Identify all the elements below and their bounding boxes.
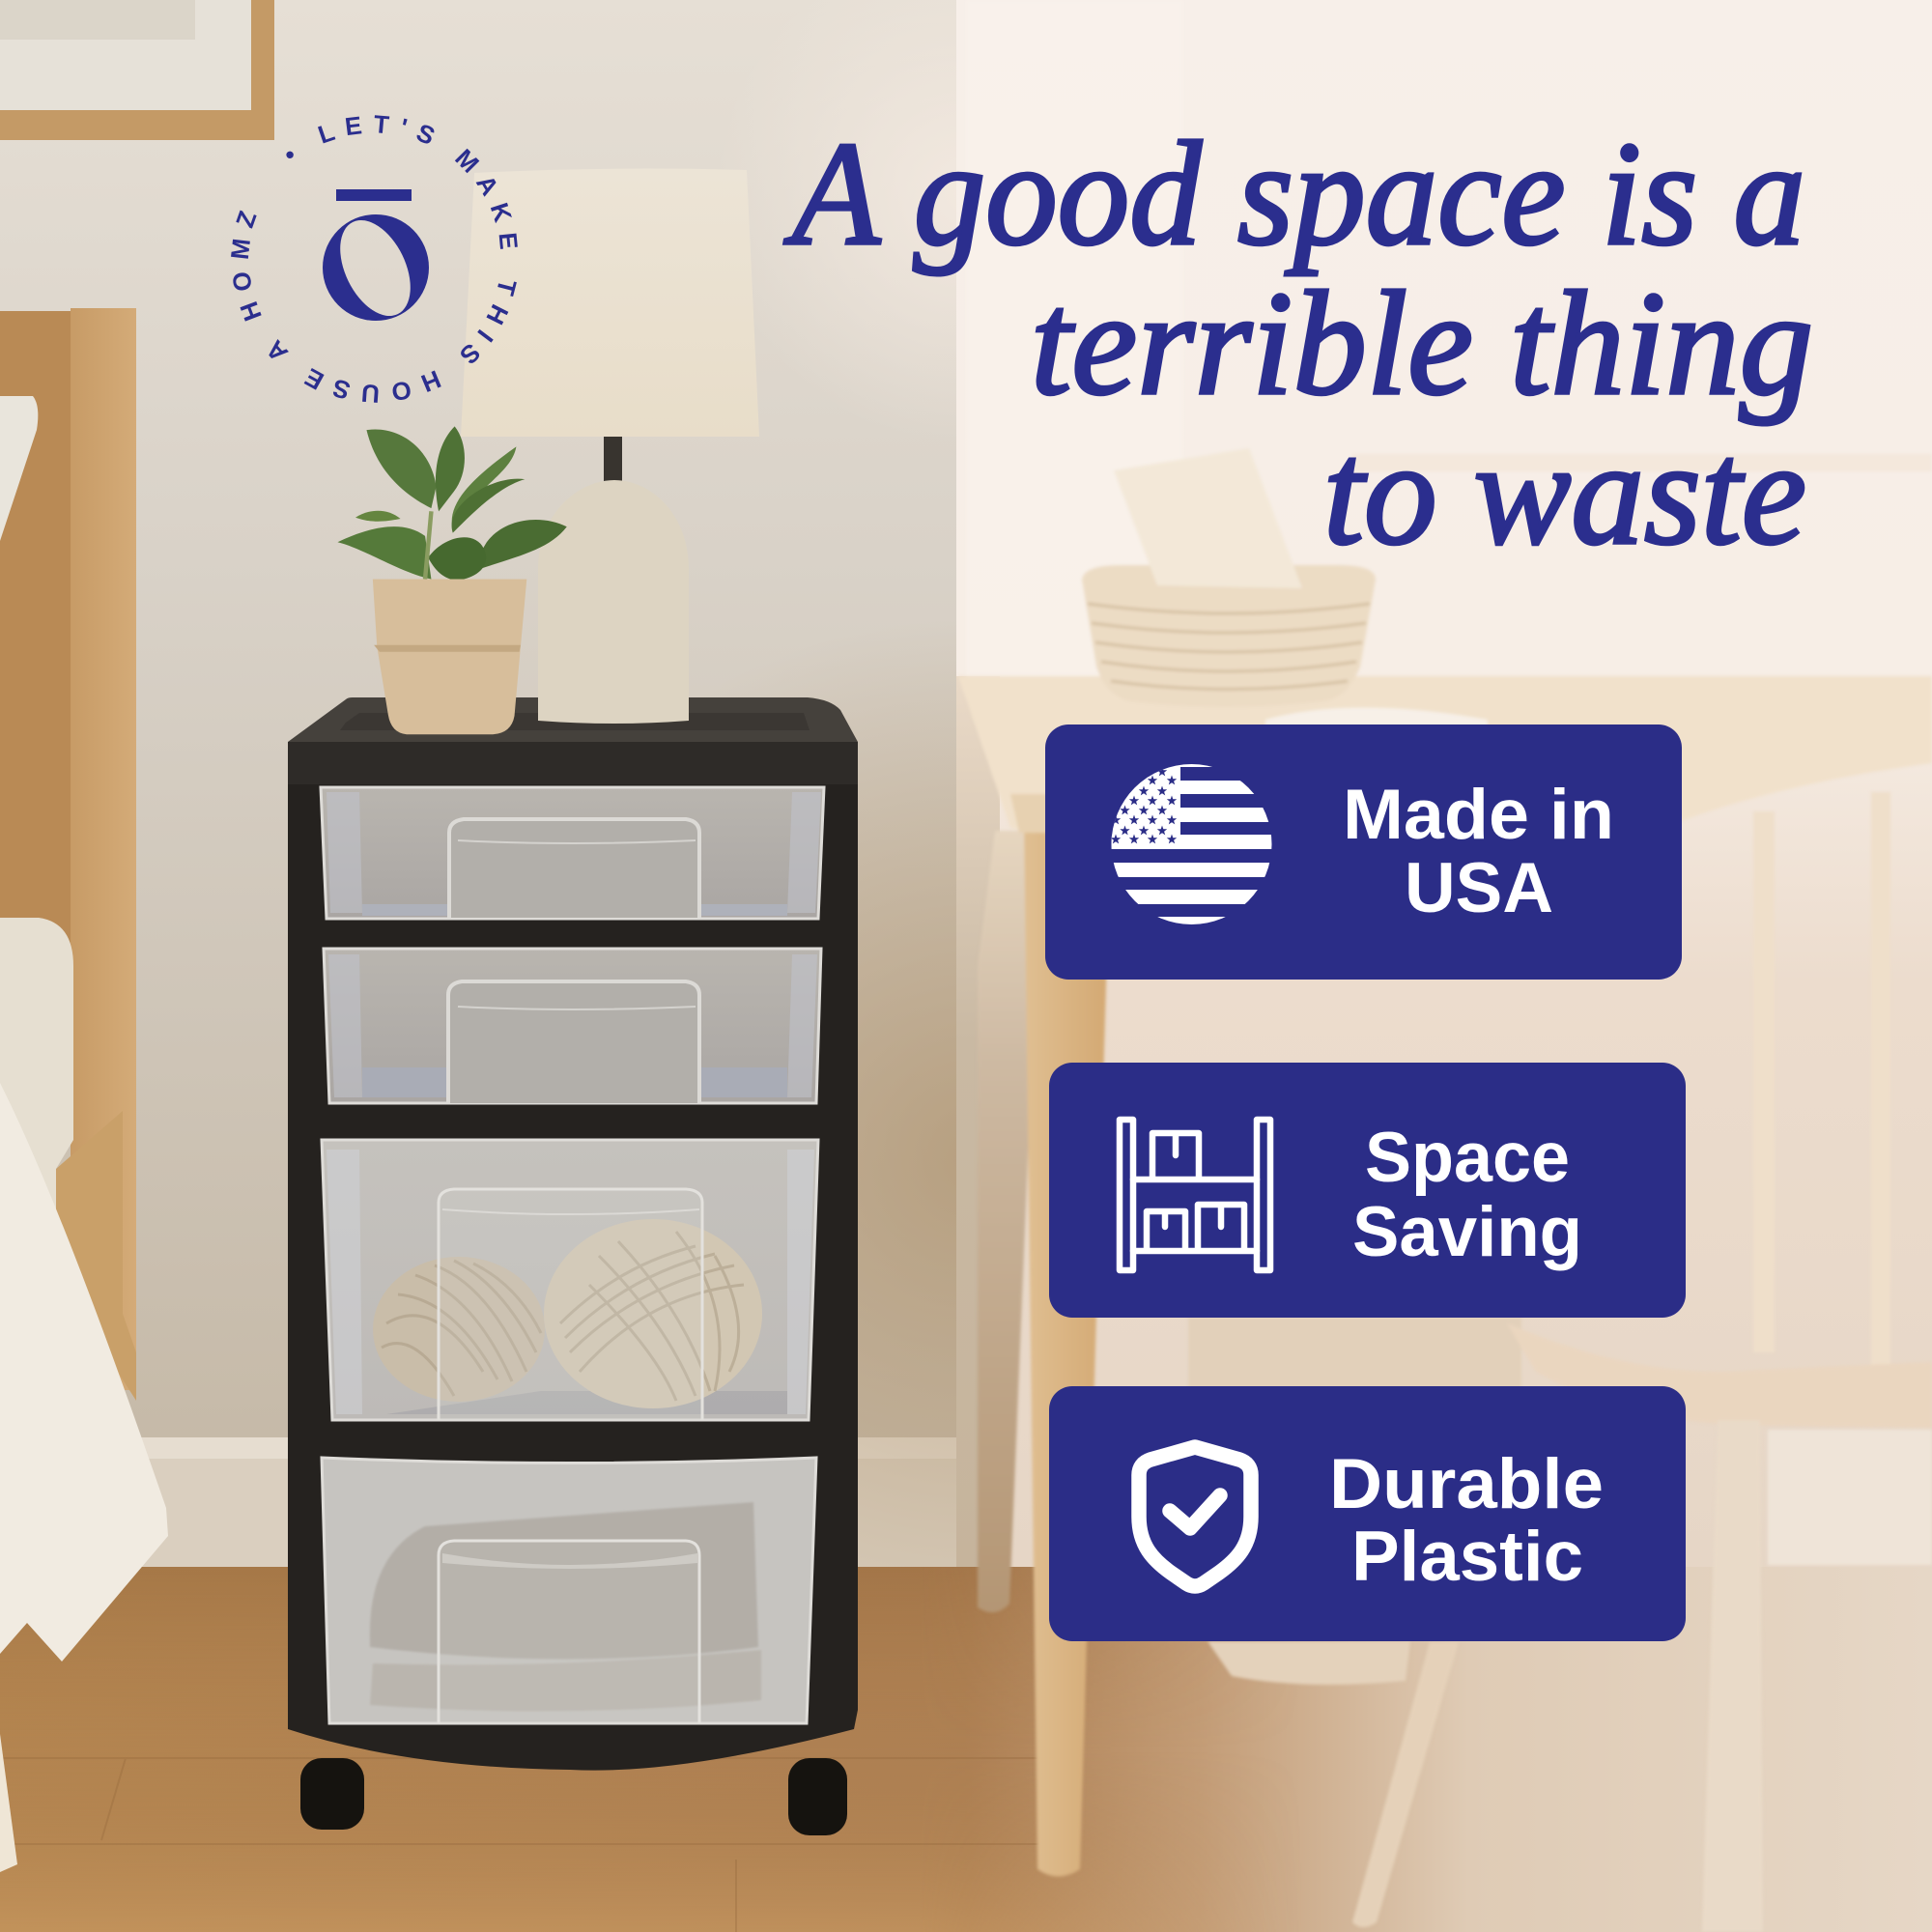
- headline line 2: terrible thing: [1031, 262, 1813, 426]
- cabinet body: [288, 742, 858, 1771]
- circular tagline: • LET'S MAKE THIS HOUSE A HOMZ: [231, 115, 518, 403]
- drawer 3 with yarn: [322, 1140, 818, 1420]
- label: space saving: [1352, 1119, 1582, 1271]
- label: made in USA: USA: [1405, 849, 1553, 927]
- headline line 3: to waste: [1323, 412, 1806, 576]
- baseboard: [0, 1437, 976, 1569]
- icon: shelving with boxes: [1120, 1120, 1270, 1270]
- chair window panel: [1768, 1430, 1932, 1565]
- icon: shield with check: [1139, 1447, 1251, 1586]
- wheels: [300, 1758, 847, 1835]
- pillow: [0, 396, 38, 541]
- wood floor: [0, 1567, 1932, 1932]
- drawer 2: [324, 949, 821, 1103]
- desk top: [958, 676, 1932, 831]
- desk front leg: [1024, 821, 1111, 1876]
- icon: american flag: [1111, 764, 1271, 924]
- bed headboard: [0, 308, 136, 1401]
- label: durable plastic: Durable: [1329, 1445, 1604, 1523]
- label: durable plastic: [1329, 1445, 1604, 1596]
- drawer 4 with towels: [322, 1458, 816, 1723]
- panel: made in USA: [1045, 724, 1682, 980]
- yarn balls: [373, 1219, 762, 1408]
- logo bar: [336, 189, 412, 201]
- label: space saving: Space: [1365, 1119, 1570, 1197]
- open book on desk: [1265, 707, 1488, 726]
- washed right side objects: [958, 0, 1932, 1932]
- panel: durable plastic: [1049, 1386, 1686, 1641]
- cabinet top: [288, 697, 858, 742]
- woven basket on desk: [1082, 565, 1376, 707]
- label: space saving: Saving: [1352, 1193, 1582, 1271]
- window sill band: [1352, 454, 1932, 471]
- warm wall shading: [435, 618, 976, 1584]
- right side washed wall: [956, 0, 1932, 1584]
- storage cabinet: [288, 697, 858, 1835]
- headline: [783, 112, 1813, 576]
- desk edge: [1010, 794, 1063, 833]
- headline: A good space is a: [783, 112, 1805, 276]
- curtain shadow strip under desk: [956, 676, 1000, 1584]
- panel: space saving: [1049, 1063, 1686, 1318]
- logo badge: [231, 115, 518, 403]
- folded towels: [370, 1502, 761, 1711]
- label: made in USA: Made in: [1343, 776, 1614, 854]
- mattress: [0, 918, 73, 1256]
- chair seat: [1507, 1323, 1932, 1428]
- picture frame: [0, 0, 274, 140]
- chair legs: [1352, 1420, 1763, 1932]
- top wall blend into curtain: [715, 0, 966, 444]
- white blanket: [0, 1083, 168, 1662]
- label: durable plastic: Plastic: [1351, 1518, 1583, 1596]
- label: made in USA: [1343, 776, 1614, 927]
- floor basket: [1188, 1318, 1521, 1685]
- logo ring: [323, 214, 429, 321]
- plant in pot: [337, 426, 567, 734]
- desk back leg: [978, 831, 1041, 1612]
- drawer 1: [321, 787, 824, 919]
- lamp: [461, 169, 759, 724]
- curtain bands: [966, 0, 1183, 676]
- chair back slats: [1753, 792, 1890, 1372]
- blanket fringe: [0, 1734, 17, 1872]
- wall: [0, 0, 976, 1584]
- book in basket: [1114, 448, 1302, 588]
